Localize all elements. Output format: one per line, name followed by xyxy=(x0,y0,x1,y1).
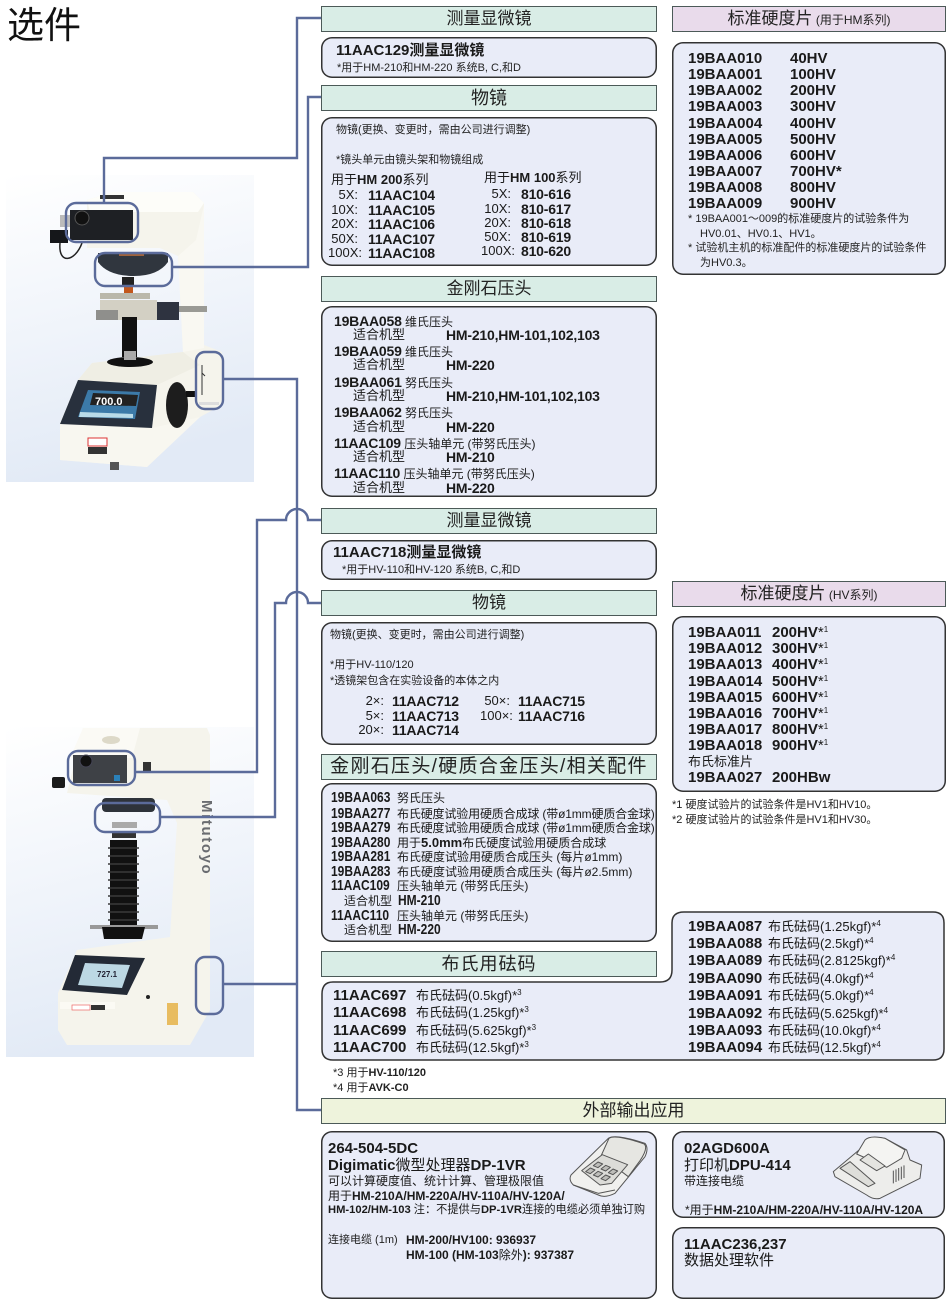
panel: Brinell weights: 19BAA090 xyxy=(688,970,762,987)
panel: objectives HM: 810-616 xyxy=(521,186,571,202)
heading: measuring microscope (HM): 测量显微镜 xyxy=(446,9,532,28)
panel: objectives HV xyxy=(321,622,657,745)
panel: objectives HM: 10X: xyxy=(331,202,358,217)
panel: diamond indenters: 19BAA058 维氏压头 xyxy=(334,313,453,329)
panel: DPU-414 printer: 带连接电缆 xyxy=(684,1174,744,1188)
panel: standard hardness blocks HV: 19BAA011 xyxy=(688,624,761,641)
panel: Brinell weights: 19BAA092 xyxy=(688,1005,762,1022)
panel: standard hardness blocks HV: 19BAA015 xyxy=(688,689,762,706)
panel: Brinell weights: 布氏砝码(5.0kgf)*4 xyxy=(768,988,874,1003)
panel: 11AAC129: *用于HM-210和HM-220 系统B, C,和D xyxy=(337,62,521,74)
panel: standard hardness blocks HM: 300HV xyxy=(790,98,836,115)
panel: standard hardness blocks HM: 600HV xyxy=(790,147,836,164)
panel: standard hardness blocks HM: 500HV xyxy=(790,131,836,148)
panel: diamond indenters: 19BAA061 努氏压头 xyxy=(334,374,453,390)
panel: Brinell weights: 布氏砝码(2.8125kgf)*4 xyxy=(768,953,895,968)
panel: objectives HV: 100×: xyxy=(480,708,513,723)
panel: Brinell weights: 19BAA088 xyxy=(688,935,762,952)
panel: diamond indenters: HM-220 xyxy=(446,357,495,373)
panel: objectives HV: 2×: xyxy=(366,693,384,708)
panel: objectives HV: 20×: xyxy=(358,722,384,737)
panel: 11AAC129 xyxy=(321,37,657,78)
panel: diamond indenters: 适合机型 xyxy=(353,357,405,372)
panel: objectives HM: 5X: xyxy=(338,187,358,202)
heading: measuring microscope (HV) xyxy=(321,508,657,534)
heading: standard hardness blocks (HV) xyxy=(672,581,946,607)
panel: standard hardness blocks HM: 800HV xyxy=(790,179,836,196)
panel: indenters and accessories: 11AAC110 xyxy=(331,907,389,924)
heading: diamond indenter xyxy=(321,276,657,302)
panel: standard hardness blocks HV: 800HV*1 xyxy=(772,721,828,738)
heading: objective (HV): 物镜 xyxy=(472,593,506,612)
panel: indenters and accessories: 19BAA063 xyxy=(331,789,390,806)
panel: standard hardness blocks HV: 19BAA014 xyxy=(688,673,762,690)
panel: standard hardness blocks HM: 900HV xyxy=(790,195,836,212)
panel: Brinell weights: 布氏砝码(1.25kgf)*4 xyxy=(768,919,881,934)
panel: indenters and accessories: 压头轴单元 (带努氏压头) xyxy=(397,879,528,893)
panel: standard hardness blocks HM: 19BAA008 xyxy=(688,179,762,196)
panel: objectives HM: 10X: xyxy=(484,201,511,216)
panel: objectives HM: 用于HM 200系列 xyxy=(331,172,429,187)
icon: DPU-414 printer xyxy=(832,1136,922,1200)
panel: standard hardness blocks HV: 19BAA012 xyxy=(688,640,762,657)
heading: objective (HM): 物镜 xyxy=(471,88,507,108)
heading: diamond and carbide indenters: 金刚石压头/硬质合金压头/相关配件 xyxy=(330,756,648,777)
panel: standard hardness blocks HV: 19BAA027 xyxy=(688,769,762,786)
panel: Brinell weights: 19BAA091 xyxy=(688,987,762,1004)
panel: objectives HV: 11AAC716 xyxy=(518,708,585,724)
footnotes: weights: *4 用于AVK-C0 xyxy=(333,1082,409,1094)
panel: objectives HM: 11AAC107 xyxy=(368,231,435,247)
heading: diamond indenter: 金刚石压头 xyxy=(446,279,532,298)
panel: standard hardness blocks HM xyxy=(672,42,946,275)
heading: standard hardness blocks (HV): 标准硬度片 (HV系列) xyxy=(740,584,878,603)
heading: standard hardness blocks (HM) xyxy=(672,6,946,32)
panel: standard hardness blocks HM: 19BAA006 xyxy=(688,147,762,164)
panel: Brinell weights: 19BAA089 xyxy=(688,952,762,969)
panel: standard hardness blocks HM: 为HV0.3。 xyxy=(700,257,753,269)
panel: indenters and accessories: HM-220 xyxy=(398,921,441,938)
panel: data processing software: 11AAC236,237 xyxy=(684,1236,787,1253)
panel: data processing software: 数据处理软件 xyxy=(684,1252,774,1269)
panel: objectives HM: 11AAC106 xyxy=(368,216,435,232)
panel: DP-1VR processor: 可以计算硬度值、统计计算、管理极限值 xyxy=(328,1174,544,1188)
panel: DP-1VR processor: 用于HM-210A/HM-220A/HV-110A/HV-120A/ xyxy=(328,1189,565,1203)
panel: standard hardness blocks HM: 19BAA010 xyxy=(688,50,762,67)
panel: standard hardness blocks HV: 900HV*1 xyxy=(772,737,828,754)
panel: standard hardness blocks HM: 19BAA007 xyxy=(688,163,762,180)
panel: Brinell weights: 11AAC697 xyxy=(333,987,406,1004)
panel: Brinell weights xyxy=(321,911,945,1061)
panel: indenters and accessories: 19BAA283 xyxy=(331,863,390,880)
panel: standard hardness blocks HM: 19BAA002 xyxy=(688,82,762,99)
panel: 11AAC718: *用于HV-110和HV-120 系统B, C,和D xyxy=(342,564,520,576)
panel: diamond indenters: HM-220 xyxy=(446,480,495,496)
panel: indenters and accessories: 适合机型 xyxy=(344,923,392,937)
panel: indenters and accessories: 19BAA281 xyxy=(331,848,390,865)
panel: standard hardness blocks HV: 布氏标准片 xyxy=(688,754,753,769)
icon: DP-1VR printer xyxy=(570,1136,648,1197)
heading: Brinell weights xyxy=(321,951,657,977)
panel: Brinell weights: 布氏砝码(12.5kgf)*4 xyxy=(768,1040,881,1055)
panel: diamond indenters: 11AAC109 压头轴单元 (带努氏压头) xyxy=(334,435,536,451)
panel: data processing software xyxy=(672,1227,945,1299)
panel: objectives HM: 50X: xyxy=(331,231,358,246)
panel: objectives HM: 50X: xyxy=(484,229,511,244)
panel: indenters and accessories: 压头轴单元 (带努氏压头) xyxy=(397,909,528,923)
panel: 11AAC718 xyxy=(321,540,657,580)
panel: Brinell weights: 布氏砝码(0.5kgf)*3 xyxy=(416,988,522,1003)
panel: Brinell weights: 布氏砝码(10.0kgf)*4 xyxy=(768,1023,881,1038)
panel: diamond indenters: 适合机型 xyxy=(353,388,405,403)
panel: objectives HV: 11AAC714 xyxy=(392,722,459,738)
panel: indenters and accessories: 努氏压头 xyxy=(397,791,445,805)
panel: standard hardness blocks HV: 19BAA017 xyxy=(688,721,762,738)
panel: objectives HV: 11AAC715 xyxy=(518,693,585,709)
panel: objectives HM: 100X: xyxy=(481,243,515,258)
panel: standard hardness blocks HM: 700HV* xyxy=(790,163,842,180)
panel: DP-1VR processor: HM-100 (HM-103除外): 937387 xyxy=(406,1248,574,1262)
panel: DPU-414 printer xyxy=(672,1131,945,1218)
panel: DP-1VR processor: HM-200/HV100: 936937 xyxy=(406,1233,536,1247)
panel: objectives HM: 810-617 xyxy=(521,201,571,217)
panel: standard hardness blocks HM: 40HV xyxy=(790,50,828,67)
upper machine: HM series: 700.0 xyxy=(95,396,123,408)
panel: standard hardness blocks HV: 200HBw xyxy=(772,769,830,786)
panel: standard hardness blocks HV: 200HV*1 xyxy=(772,624,828,641)
panel: indenters and accessories: 布氏硬度试验用硬质合成压头 (每片ø1mm) xyxy=(397,850,622,864)
panel: DPU-414 printer: *用于HM-210A/HM-220A/HV-110A/HV-120A xyxy=(685,1203,923,1217)
panel: DPU-414 printer: 02AGD600A xyxy=(684,1140,770,1157)
panel: diamond indenters: 19BAA059 维氏压头 xyxy=(334,343,453,359)
heading: objective (HV) xyxy=(321,590,657,616)
panel: objectives HM: 11AAC105 xyxy=(368,202,435,218)
panel: diamond indenters: 适合机型 xyxy=(353,480,405,495)
heading: standard hardness blocks (HM): 标准硬度片 (用于HM系列) xyxy=(728,9,890,28)
panel: objectives HM: 5X: xyxy=(491,186,511,201)
panel: diamond indenters: HM-220 xyxy=(446,419,495,435)
panel: indenters and accessories: 布氏硬度试验用硬质合成球 (带ø1mm硬质合金球) xyxy=(397,821,655,835)
panel: DP-1VR processor: 连接电缆 (1m) xyxy=(328,1234,398,1246)
panel: standard hardness blocks HM: 19BAA009 xyxy=(688,195,762,212)
heading: Brinell weights: 布氏用砝码 xyxy=(442,954,536,974)
panel: objectives HV: *用于HV-110/120 xyxy=(330,659,414,671)
panel: diamond indenters: HM-210,HM-101,102,103 xyxy=(446,327,600,343)
panel: Brinell weights: 11AAC699 xyxy=(333,1022,406,1039)
panel: indenters and accessories: 11AAC109 xyxy=(331,877,390,894)
heading: external output: 外部输出应用 xyxy=(582,1101,684,1120)
panel: objectives HV: 物镜(更换、变更时，需由公司进行调整) xyxy=(330,629,524,641)
panel: diamond indenters: 19BAA062 努氏压头 xyxy=(334,404,453,420)
panel: standard hardness blocks HM: 100HV xyxy=(790,66,836,83)
panel: Brinell weights: 布氏砝码(1.25kgf)*3 xyxy=(416,1005,529,1020)
panel: diamond indenters xyxy=(321,306,657,497)
panel: DP-1VR processor: Digimatic微型处理器DP-1VR xyxy=(328,1157,526,1174)
panel: Brinell weights: 19BAA087 xyxy=(688,918,762,935)
panel: objectives HM xyxy=(321,117,657,266)
panel: DP-1VR processor xyxy=(321,1131,657,1299)
panel: 11AAC129: 11AAC129测量显微镜 xyxy=(336,42,484,59)
footnotes: weights: *3 用于HV-110/120 xyxy=(333,1067,426,1079)
connector lines and highlights xyxy=(66,18,321,1110)
panel: standard hardness blocks HM: * 试验机主机的标准配件的标准硬度片的试验条件 xyxy=(688,242,926,254)
panel: Brinell weights: 19BAA094 xyxy=(688,1039,762,1056)
panel: DP-1VR processor: 264-504-5DC xyxy=(328,1140,418,1157)
panel: diamond indenters: 11AAC110 压头轴单元 (带努氏压头) xyxy=(334,465,535,481)
panel: indenters and accessories xyxy=(321,783,657,942)
panel: DPU-414 printer: 打印机DPU-414 xyxy=(684,1157,791,1174)
panel: objectives HM: 用于HM 100系列 xyxy=(484,170,582,185)
panel: indenters and accessories: 19BAA279 xyxy=(331,819,390,836)
panel: indenters and accessories: 布氏硬度试验用硬质合成球 (带ø1mm硬质合金球) xyxy=(397,807,655,821)
panel: objectives HM: 物镜(更换、变更时，需由公司进行调整) xyxy=(336,124,530,136)
panel: standard hardness blocks HV: 600HV*1 xyxy=(772,689,828,706)
panel: Brinell weights: 布氏砝码(2.5kgf)*4 xyxy=(768,936,874,951)
lower machine: HV series: 727.1 xyxy=(97,970,118,979)
panel: indenters and accessories: HM-210 xyxy=(398,892,441,909)
lower machine: HV series xyxy=(6,727,254,1057)
panel: Brinell weights: 布氏砝码(12.5kgf)*3 xyxy=(416,1040,529,1055)
panel: objectives HV: 50×: xyxy=(484,693,510,708)
panel: objectives HM: 11AAC108 xyxy=(368,245,435,261)
panel: standard hardness blocks HM: * 19BAA001～009的标准硬度片的试验条件为 xyxy=(688,213,909,225)
heading: objective (HM) xyxy=(321,85,657,111)
panel: Brinell weights: 19BAA093 xyxy=(688,1022,762,1039)
panel: standard hardness blocks HM: 400HV xyxy=(790,115,836,132)
panel: 11AAC718: 11AAC718测量显微镜 xyxy=(333,544,481,561)
page title: 选件 xyxy=(7,5,81,46)
panel: objectives HM: 20X: xyxy=(331,216,358,231)
footnotes: hardness test conditions: *2 硬度试验片的试验条件是HV1和HV30。 xyxy=(672,814,877,826)
panel: objectives HM: 810-619 xyxy=(521,229,571,245)
panel: indenters and accessories: 适合机型 xyxy=(344,894,392,908)
heading: measuring microscope (HV): 测量显微镜 xyxy=(446,511,532,530)
panel: objectives HV: *透镜架包含在实验设备的本体之内 xyxy=(330,675,499,687)
panel: objectives HM: 810-620 xyxy=(521,243,571,259)
panel: objectives HV: 11AAC712 xyxy=(392,693,459,709)
panel: Brinell weights: 11AAC698 xyxy=(333,1004,406,1021)
panel: standard hardness blocks HM: 200HV xyxy=(790,82,836,99)
panel: diamond indenters: 适合机型 xyxy=(353,327,405,342)
panel: standard hardness blocks HV: 19BAA013 xyxy=(688,656,762,673)
heading: measuring microscope (HM) xyxy=(321,6,657,32)
panel: objectives HM: 11AAC104 xyxy=(368,187,435,203)
upper machine: HM series xyxy=(6,175,254,482)
panel: objectives HM: 20X: xyxy=(484,215,511,230)
panel: diamond indenters: 适合机型 xyxy=(353,419,405,434)
panel: standard hardness blocks HV: 19BAA016 xyxy=(688,705,762,722)
panel: standard hardness blocks HV: 500HV*1 xyxy=(772,673,828,690)
panel: objectives HV: 11AAC713 xyxy=(392,708,459,724)
panel: standard hardness blocks HV: 400HV*1 xyxy=(772,656,828,673)
heading: external output xyxy=(321,1098,946,1124)
panel: diamond indenters: HM-210 xyxy=(446,449,495,465)
panel: diamond indenters: 适合机型 xyxy=(353,449,405,464)
panel: standard hardness blocks HM: 19BAA004 xyxy=(688,115,762,132)
panel: standard hardness blocks HV: 19BAA018 xyxy=(688,737,762,754)
panel: objectives HM: *镜头单元由镜头架和物镜组成 xyxy=(336,154,483,166)
panel: Brinell weights: 布氏砝码(5.625kgf)*3 xyxy=(416,1023,536,1038)
panel: standard hardness blocks HM: 19BAA001 xyxy=(688,66,762,83)
panel: objectives HM: 100X: xyxy=(328,245,362,260)
footnotes: hardness test conditions: *1 硬度试验片的试验条件是HV1和HV10。 xyxy=(672,799,877,811)
panel: DP-1VR processor: HM-102/HM-103 注：不提供与DP-1VR连接的电缆必须单独订购 xyxy=(328,1204,645,1216)
panel: indenters and accessories: 用于5.0mm布氏硬度试验用硬质合成球 xyxy=(397,835,606,850)
panel: objectives HM: 810-618 xyxy=(521,215,571,231)
lower machine: HV series: Mitutoyo xyxy=(198,800,215,875)
panel: objectives HV: 5×: xyxy=(366,708,384,723)
panel: Brinell weights: 布氏砝码(4.0kgf)*4 xyxy=(768,971,874,986)
panel: standard hardness blocks HV: 700HV*1 xyxy=(772,705,828,722)
panel: indenters and accessories: 19BAA280 xyxy=(331,834,390,851)
panel: standard hardness blocks HV: 300HV*1 xyxy=(772,640,828,657)
panel: indenters and accessories: 19BAA277 xyxy=(331,805,390,822)
panel: standard hardness blocks HV xyxy=(672,616,946,792)
panel: indenters and accessories: 布氏硬度试验用硬质合成压头 (每片ø2.5mm) xyxy=(397,865,632,879)
panel: standard hardness blocks HM: 19BAA003 xyxy=(688,98,762,115)
panel: diamond indenters: HM-210,HM-101,102,103 xyxy=(446,388,600,404)
footnotes: hardness test conditions xyxy=(672,798,877,826)
panel: Brinell weights: 布氏砝码(5.625kgf)*4 xyxy=(768,1006,888,1021)
panel: Brinell weights: 11AAC700 xyxy=(333,1039,406,1056)
panel: standard hardness blocks HM: HV0.01、HV0.1、HV1。 xyxy=(700,228,822,240)
panel: standard hardness blocks HM: 19BAA005 xyxy=(688,131,762,148)
footnotes: weights xyxy=(333,1067,426,1094)
